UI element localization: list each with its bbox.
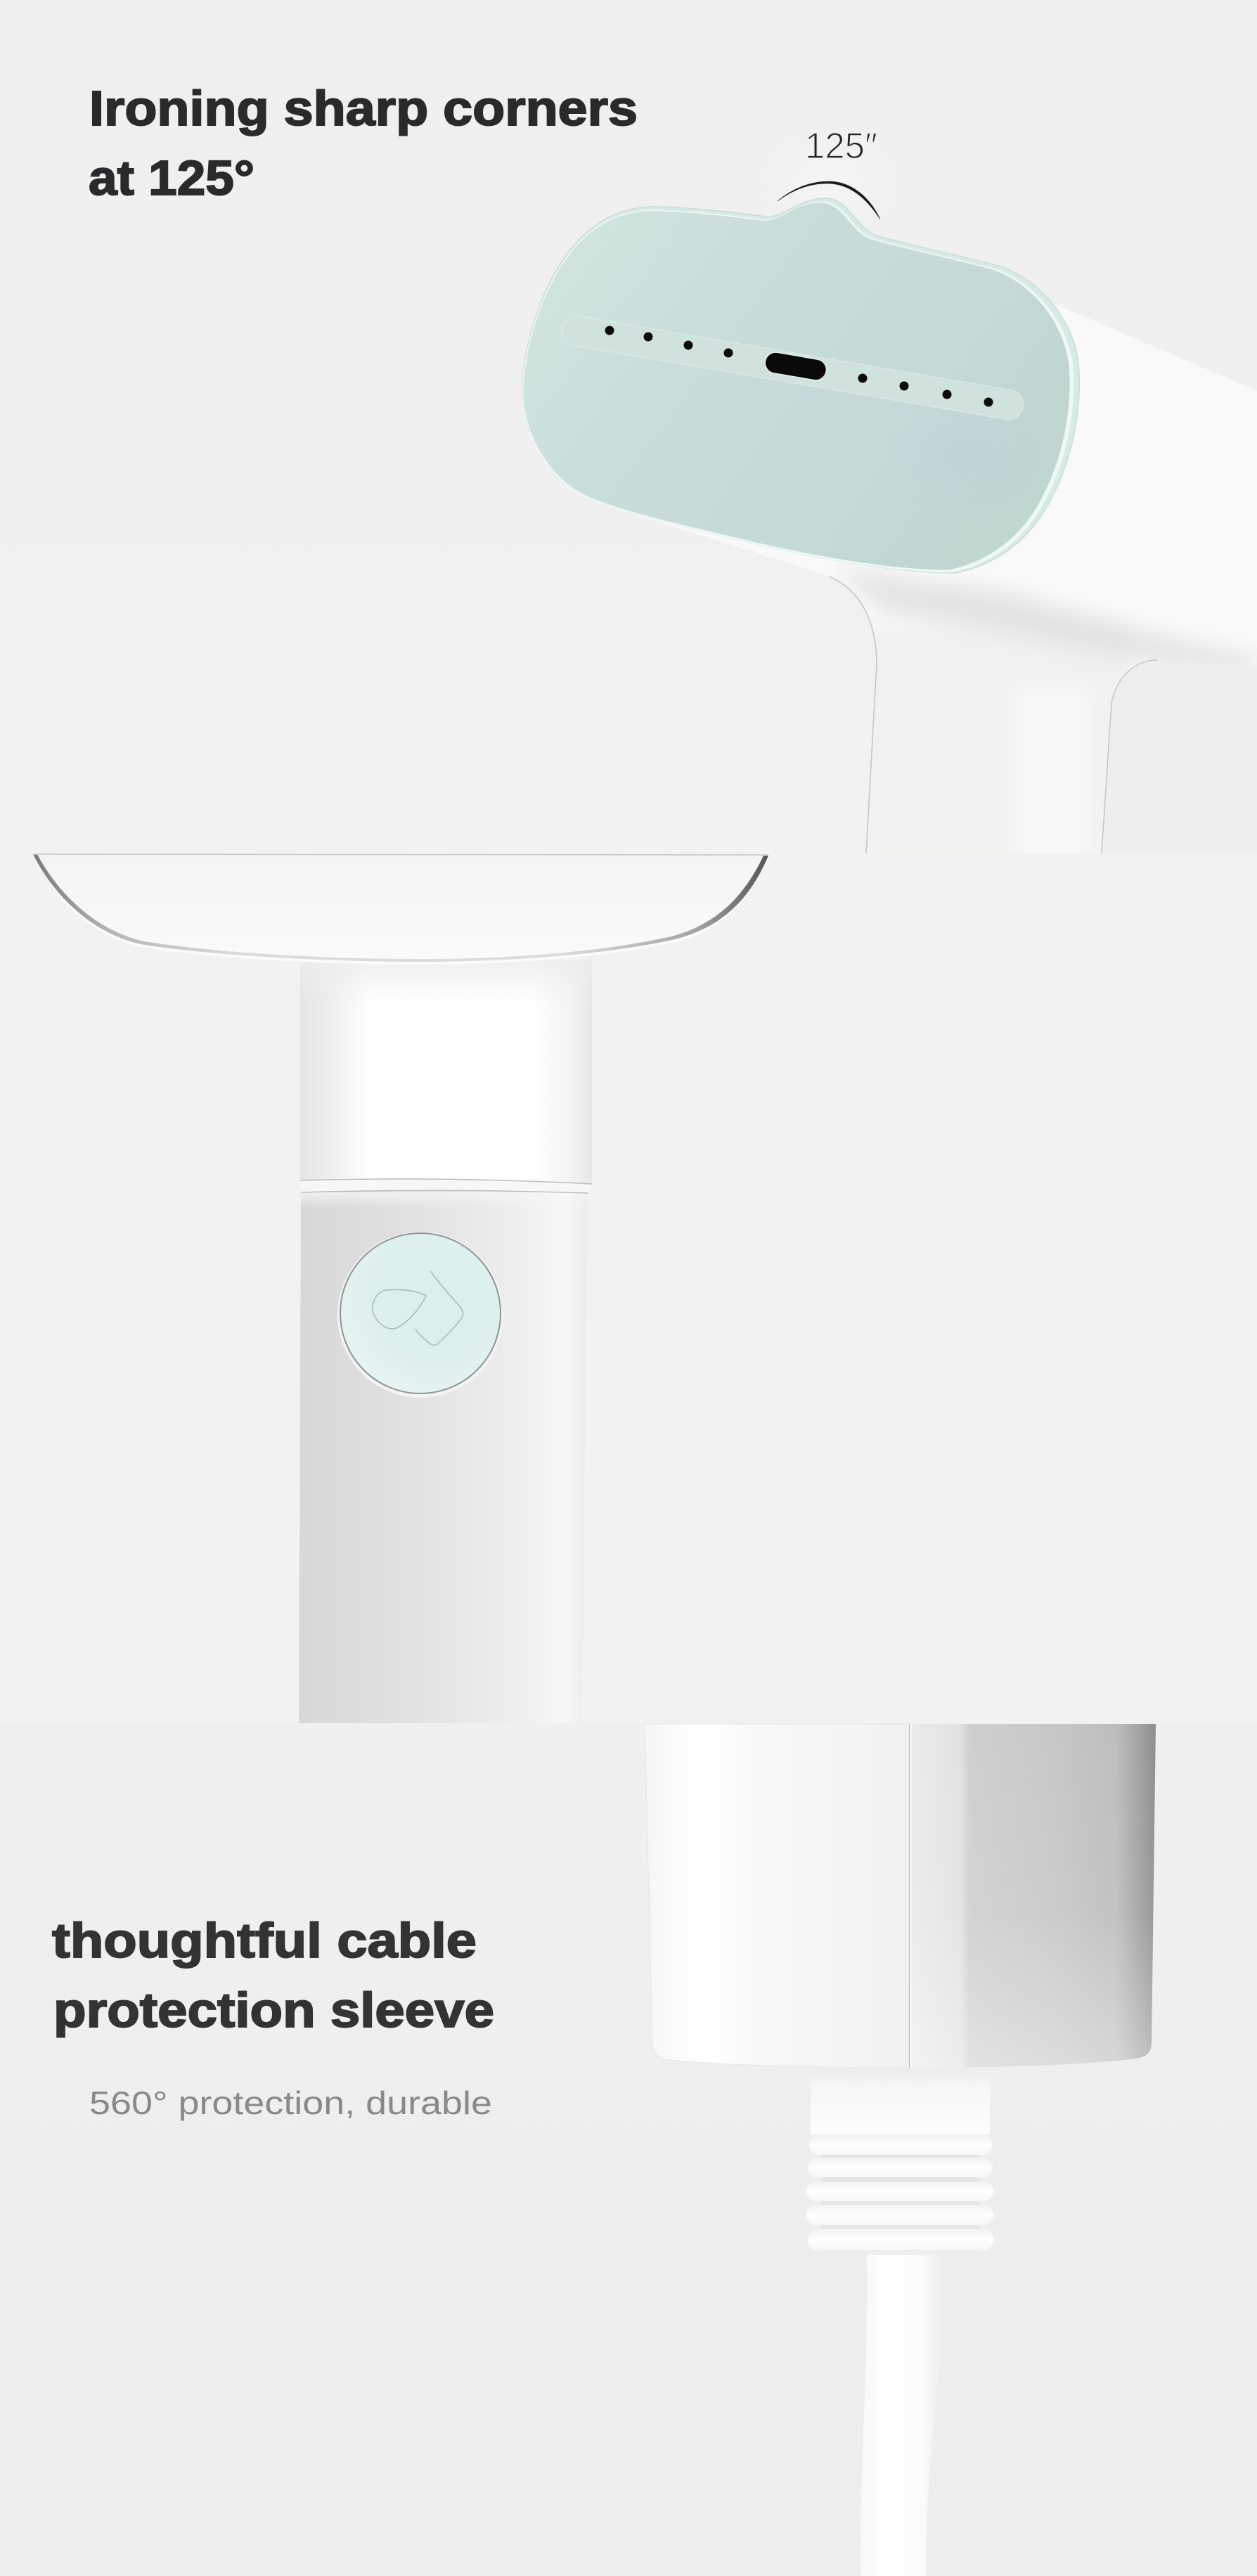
panel: button and handle [0,854,1257,1723]
angle arc [778,181,880,219]
white halo behind head [773,141,886,225]
central steam slot [763,351,828,382]
heading: ironing sharp corners: at 125° [89,150,254,205]
panel: cable protection sleeve [0,1723,1257,2576]
steam holes [605,326,993,406]
steamer head [522,198,1079,573]
seam ring [300,1179,592,1193]
handle upper stem [300,960,592,1185]
neck outlines [830,577,1157,854]
strain relief ribs [806,2135,993,2251]
plug housing right face [911,1724,1156,2068]
power cable [860,2255,945,2576]
subheading: 560° protection, durable [89,2085,492,2121]
icon: water drop and hook [373,1271,463,1345]
heading: thoughtful cable: thoughtful cable [52,1913,477,1968]
plug housing left face [645,1724,910,2068]
water button [337,1232,503,1398]
heading: ironing sharp corners: Ironing sharp corners [89,81,638,136]
steam strip [560,314,1026,422]
heading: thoughtful cable: protection sleeve [53,1983,494,2037]
strain relief collar [811,2069,990,2134]
angle label: 125″ [805,126,877,167]
panel: ironing sharp corners [89,89,1257,854]
handle lower section [299,1190,588,1723]
steamer body and neck [645,304,1257,658]
steamer head underside [33,854,768,965]
